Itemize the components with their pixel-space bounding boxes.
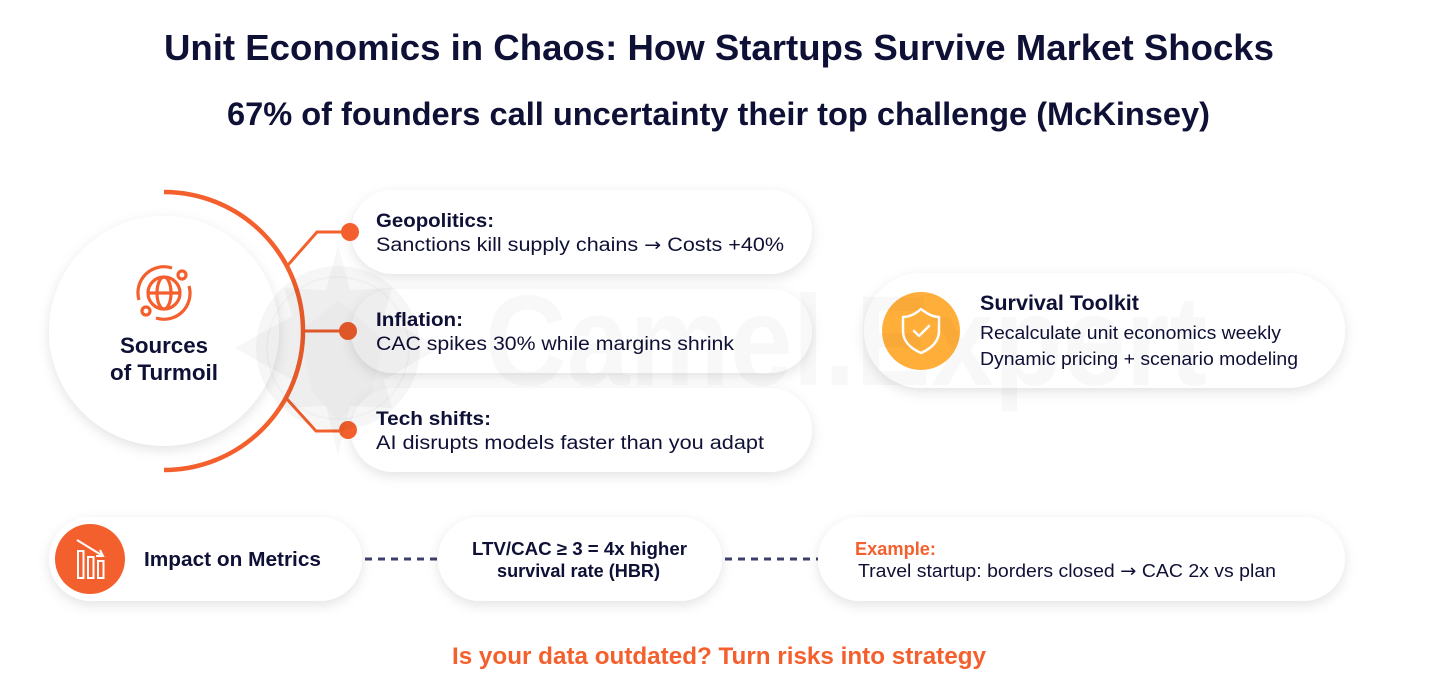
panel: tech shifts: AI disrupts models faster than you adapt: [376, 433, 765, 454]
panel: sources of turmoil: of Turmoil: [110, 360, 218, 385]
panel: example: [818, 517, 1345, 601]
panel: inflation: [351, 289, 812, 373]
call to action: Is your data outdated? Turn risks into strategy: [452, 643, 987, 670]
panel: ltv/cac: [438, 517, 722, 601]
panel: tech shifts: [351, 388, 812, 472]
panel: survival toolkit: Recalculate unit economics weekly: [980, 323, 1281, 343]
panel: sources of turmoil: Sources: [120, 333, 208, 358]
panel: tech shifts: Tech shifts:: [376, 409, 491, 430]
panel: ltv/cac: LTV/CAC ≥ 3 = 4x higher: [472, 539, 687, 559]
connector dots: [339, 223, 359, 439]
title: Unit Economics in Chaos: How Startups Survive Market Shocks: [164, 27, 1274, 68]
dashed connectors: [365, 558, 818, 560]
panel: inflation: Inflation:: [376, 310, 463, 331]
panel: survival toolkit: Dynamic pricing + scenario modeling: [980, 349, 1298, 369]
panel: impact on metrics: [49, 517, 362, 601]
panel: example: Example:: [855, 539, 936, 559]
icon: shield: [903, 309, 939, 353]
panel: geopolitics: Geopolitics:: [376, 211, 494, 232]
panel: survival toolkit: Survival Toolkit: [980, 292, 1139, 315]
panel: inflation: CAC spikes 30% while margins shrink: [376, 334, 735, 355]
watermark: compass: [235, 245, 440, 455]
panel: impact on metrics: Impact on Metrics: [144, 549, 321, 571]
panel: example: Travel startup: borders closed → CAC 2x vs plan: [858, 561, 1276, 582]
panel: sources of turmoil: [49, 216, 279, 446]
arc: [164, 192, 303, 470]
panel: ltv/cac: survival rate (HBR): [497, 561, 660, 581]
connectors: [286, 232, 350, 431]
panel: geopolitics: [351, 190, 812, 274]
subtitle: 67% of founders call uncertainty their top challenge (McKinsey): [227, 96, 1210, 132]
icon: globe: [138, 267, 190, 319]
icon: falling bars: [77, 540, 104, 578]
panel: survival toolkit: [864, 273, 1345, 388]
watermark: text: Camel.Expert: [485, 270, 1207, 413]
panel: geopolitics: Sanctions kill supply chains → Costs +40%: [376, 235, 784, 256]
